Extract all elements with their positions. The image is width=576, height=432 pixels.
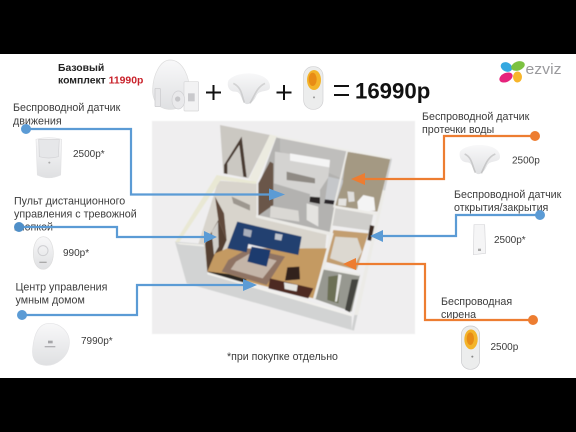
price: control hub: 7990р* <box>81 336 113 347</box>
label: siren: Беспроводная <box>441 296 512 308</box>
closet <box>313 268 360 312</box>
arrow: door sensor <box>370 210 545 242</box>
balcony <box>220 125 270 178</box>
equals sign <box>334 86 349 95</box>
label: water leak sensor: Беспроводной датчик <box>422 111 530 123</box>
total price: 16990р <box>355 78 430 104</box>
right wall <box>352 157 392 331</box>
label: motion sensor <box>13 102 121 128</box>
icon: remote <box>33 237 53 269</box>
arrow: remote <box>14 222 217 243</box>
label: water leak sensor <box>422 111 530 136</box>
heading: base kit <box>58 63 143 86</box>
plus sign 1 <box>206 85 221 100</box>
rug <box>222 248 285 285</box>
label: motion sensor: движения <box>13 116 62 128</box>
arrow: motion sensor <box>21 124 285 200</box>
label: remote control: управления с тревожной <box>14 208 137 220</box>
kitchen back wall and floor <box>258 137 347 233</box>
icon: control hub <box>32 323 69 365</box>
label: door sensor <box>454 189 562 214</box>
arrow: control hub <box>17 279 257 320</box>
label: door sensor: Беспроводной датчик <box>454 189 562 201</box>
logo: ezviz <box>498 59 562 85</box>
label: siren <box>441 296 512 321</box>
label: water leak sensor: протечки воды <box>422 124 494 136</box>
icon: water leak sensor right <box>460 145 500 174</box>
icon: door sensor <box>473 225 486 255</box>
arrow: siren <box>343 258 538 325</box>
logo petals <box>498 59 526 85</box>
front wall <box>175 242 352 330</box>
price: siren: 2500р <box>490 342 519 353</box>
label: door sensor: открытия/закрытия <box>454 202 549 214</box>
footnote: *при покупке отдельно <box>227 351 338 363</box>
arrow: water leak sensor <box>351 131 540 185</box>
label: motion sensor: Беспроводной датчик <box>13 102 121 114</box>
price: door sensor: 2500р* <box>494 235 526 246</box>
heading: base kit: комплект 11990р <box>58 76 143 86</box>
icon: siren bottom <box>461 326 480 369</box>
heading: base kit: Базовый <box>58 63 104 74</box>
wood floor <box>207 248 327 298</box>
sofa <box>227 222 302 255</box>
icon: motion sensor <box>36 138 62 178</box>
logo wordmark: ezviz <box>526 61 562 78</box>
label: siren: сирена <box>441 309 476 321</box>
price: remote: 990р* <box>63 248 89 259</box>
icon: base kit devices <box>153 60 199 111</box>
icon: siren top <box>304 67 323 109</box>
bottom black bar <box>0 378 576 432</box>
left wall of living room <box>198 181 327 272</box>
price: water leak sensor: 2500р <box>512 156 540 166</box>
top black bar <box>0 0 576 54</box>
hallway <box>325 230 368 270</box>
bathroom <box>335 152 391 212</box>
icon: water leak sensor top <box>228 73 270 104</box>
label: remote control: кнопкой <box>14 222 53 234</box>
label: control hub: Центр управления <box>16 282 108 294</box>
dark furniture <box>268 278 313 298</box>
label: control hub: умным домом <box>16 294 85 306</box>
apartment floor plan panel <box>152 121 415 334</box>
label: remote control: Пульт дистанционного <box>14 196 125 208</box>
label: remote control <box>14 196 137 234</box>
plus sign 2 <box>276 85 292 100</box>
price: motion sensor: 2500р* <box>73 149 105 160</box>
white wall tops <box>249 134 277 183</box>
label: control hub <box>16 282 108 306</box>
